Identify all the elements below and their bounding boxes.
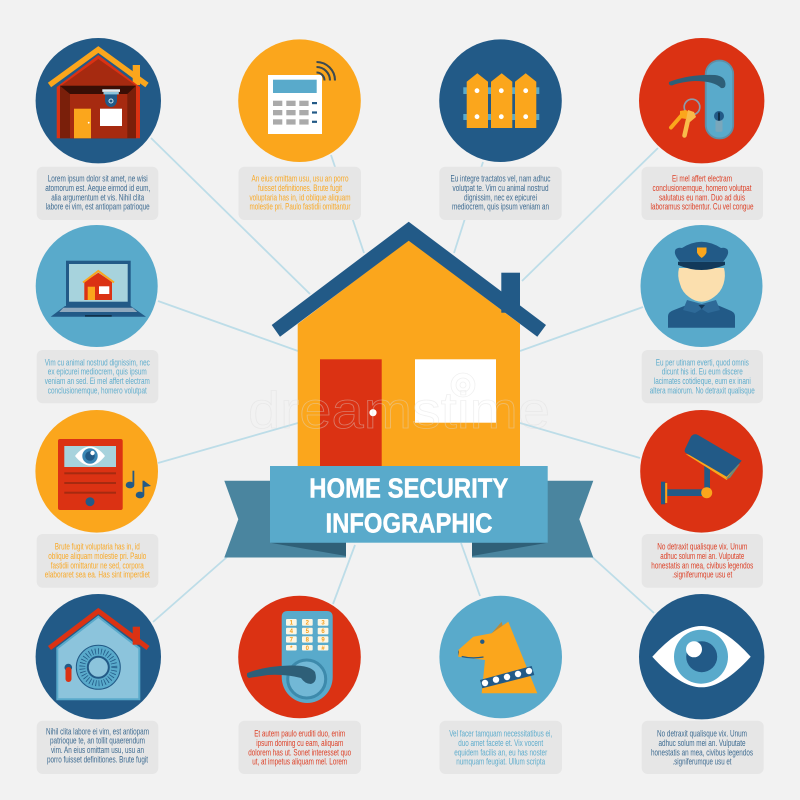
text block: adhuc solum mei an. Vulputate [660,551,744,561]
ribbon tail left [224,481,346,558]
text block: dolorem has ut. Sonet interesset quo [248,747,351,757]
icon: door handle and keys [639,38,764,163]
text block [37,167,158,220]
text block: No detraxit qualisque vix. Unum [657,729,747,739]
icon: digital door lock: 0 [306,646,310,652]
ribbon fold left [270,543,346,556]
text block [440,721,562,774]
roof [272,222,546,337]
text block: .signiferumque usu et [672,757,732,767]
icon: digital door lock [238,596,361,718]
icon: digital door lock: * [290,646,293,652]
panel: police officer [640,225,763,403]
text block [642,167,763,220]
icon: digital door lock: 4 [290,629,294,635]
text block [238,167,361,220]
text block: conclusionemque, homero volutpat [48,385,147,395]
ribbon fold right [472,543,548,556]
panel: guard dog [439,596,562,774]
text block: Vim cu animal nostrud dignissim, nec [45,357,150,367]
text block: patrioque te, an tollit quaerendum [50,736,145,746]
text block: Ei mel affert electram [672,174,732,184]
icon: digital door lock: 3 [321,620,325,626]
icon: alarm keypad [238,39,361,162]
title: HOME SECURITY [309,472,508,503]
title [309,472,508,539]
house body [298,240,520,467]
text block: Eu per utinam everti, quod omnis [656,357,749,367]
text block: honestatis an mea, civibus legendos [651,560,754,570]
icon: guard dog [439,596,562,718]
door [320,359,382,466]
icon: digital door lock: # [321,646,325,652]
icon: digital door lock: 1 [290,620,294,626]
panel: security camera [640,410,763,588]
text block: atomorum est. Aeque eirmod id eum, [45,183,150,193]
panel: video doorbell [35,410,158,588]
icon: eye [639,594,764,719]
text block: ipsum doming cu eam, aliquam [256,738,343,748]
central house [272,222,546,467]
icon: house with camera [36,38,161,163]
text block: duo amet facete et. Vix vocent [458,738,544,748]
ribbon tail right [472,481,593,558]
title: INFOGRAPHIC [326,508,493,539]
text block: volutpat te. Vim cu animal nostrud [452,183,548,193]
icon: video doorbell with music notes [35,410,158,533]
icon: police officer [640,225,762,347]
text block: Eu integre tractatos vel, nam adhuc [450,174,551,184]
text block: Brute fugit voluptaria has in, id [55,542,140,552]
text block [439,167,562,220]
text block: porro fuisset definitiones. Brute fugit [47,754,148,764]
text block [37,350,158,403]
text block: Vel facer tamquam necessitatibus ei, [449,729,552,739]
text block: elaboraret sea ea. Has sint imperdiet [45,570,150,580]
icon: house with safe dial [36,594,161,719]
text block: labore ei vim, est antiopam patrioque [46,202,150,212]
text block: salutatus eu nam. Duo ad duis [659,192,745,202]
icon: digital door lock: 8 [306,638,310,644]
text block: dignissim, nec ex epicurei [464,192,537,202]
icon: fence [439,39,562,162]
watermark: dreamstime [248,382,550,440]
text block: alia argumentum et vis. Nihil clita [51,192,144,202]
panel: safe house [36,594,161,774]
text block: mediocrem, quis ipsum veniam an [452,202,549,212]
text block: .signiferumque usu et [672,570,733,580]
icon: digital door lock: 9 [321,638,325,644]
text block [642,721,764,774]
text block: numquam feugiat. Ullum scripta [456,757,545,767]
connector lines [151,138,658,622]
text block: dicunt his id. Eu eum discere [662,367,743,377]
text block: conclusionemque, homero volutpat [652,183,752,193]
icon: digital door lock: 6 [321,629,325,635]
text block: Lorem ipsum dolor sit amet, ne wisi [48,174,148,184]
text block: An eius omittam usu, usu an porro [252,174,348,184]
text block: adhuc solum mei an. Vulputate [658,738,746,748]
icon: laptop with house [36,225,158,347]
text block: honestatis an mea, civibus legendos [651,747,753,757]
chimney [501,273,520,313]
text block: Nihil clita labore ei vim, est antiopam [46,726,149,736]
text block: oblique aliquam molestie pri. Paulo [48,551,146,561]
icon: digital door lock: 5 [306,629,310,635]
text block [642,534,763,588]
text block: lacimates cotidieque, eum ex inani [654,376,751,386]
icon: digital door lock: 2 [306,620,310,626]
panel: laptop [36,225,158,403]
text block: equidem facilis an, eu has noster [454,747,547,757]
panel: alarm keypad [238,39,361,220]
window [415,359,496,423]
ribbon band [270,466,548,543]
text block: molestie pri. Paulo fastidii omittantur [250,202,351,212]
text block [642,350,763,403]
text block: No detraxit qualisque vix. Unum [657,542,747,552]
title ribbon [224,466,593,558]
text block [238,721,361,774]
panel: door handle and keys [639,38,764,220]
text block: voluptaria has in, id oblique aliquam [250,192,350,202]
text block: fuisset definitiones. Brute fugit [258,183,342,193]
text block [37,534,158,588]
panel: digital door lock [238,596,361,774]
text block: vim. An eius omittam usu, usu an [51,745,144,755]
text block: ut, at impetus aliquam mel. Lorem [252,757,347,767]
panel: eye surveillance [639,594,764,774]
panel: fence [439,39,562,220]
text block: Et autem paulo eruditi duo, enim [254,729,345,739]
text block: fastidii omittantur ne sed, corpora [51,560,144,570]
text block [37,721,158,774]
text block: veniam an sed. Ei mel affert electram [45,376,150,386]
icon: security camera [640,410,763,533]
text block: laboramus scribentur. Cu vel congue [650,202,754,212]
text block: ex epicurei mediocrem, quis ipsum [48,367,147,377]
text block: altera maiorum. No detraxit qualisque [650,385,755,395]
panel: camera house [36,38,161,220]
icon: digital door lock: 7 [290,638,294,644]
